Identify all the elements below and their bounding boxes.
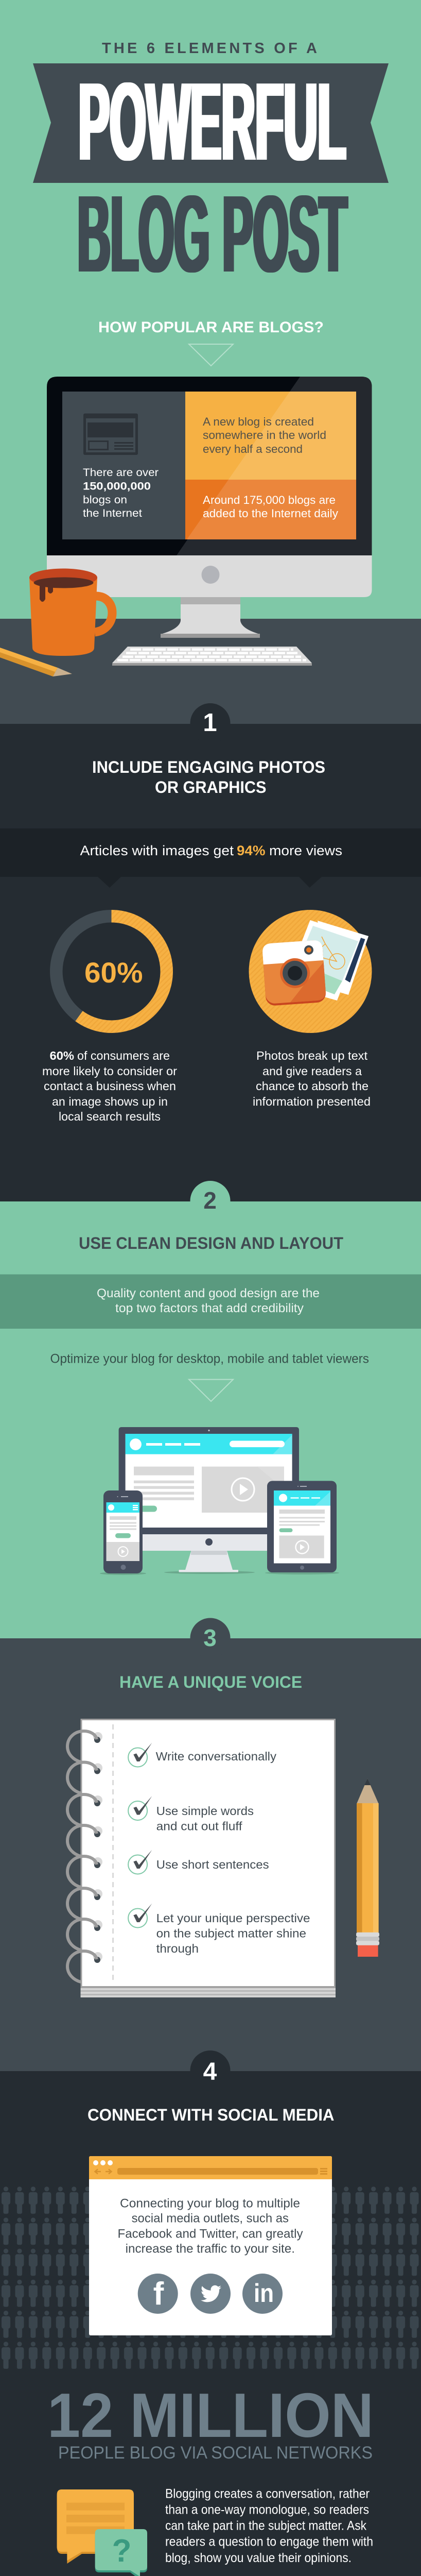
check icon 3: [128, 1850, 152, 1874]
band: articles with images stat: 94%: [237, 843, 266, 858]
section 1 heading: [92, 758, 325, 796]
section 2 heading: USE CLEAN DESIGN AND LAYOUT: [79, 1234, 343, 1252]
stat text: 175,000 blogs daily: Around 175,000 blogs are: [203, 494, 336, 506]
check icon 2: [128, 1796, 152, 1820]
text: blogging creates a conversation: [165, 2486, 373, 2565]
stat text: 150,000,000 blogs: blogs on: [83, 494, 127, 506]
text: 60 percent of consumers: more likely to consider or: [42, 1064, 177, 1078]
monitor chin: [47, 555, 372, 597]
checklist item 3: Use short sentences: [156, 1858, 269, 1871]
browser text: increase the traffic to your site.: [126, 2242, 295, 2256]
stat: 12 million: PEOPLE BLOG VIA SOCIAL NETWORKS: [58, 2443, 373, 2463]
text: 60 percent of consumers: [42, 1049, 177, 1123]
illustration: spiral notebook: [67, 1720, 336, 1997]
stat text: 150,000,000 blogs: the Internet: [83, 507, 142, 519]
band: quality content: Quality content and good design are the: [97, 1286, 320, 1300]
section 2 number badge: [190, 1181, 231, 1221]
text: blogging creates a conversation: can take part in the subject matter. Ask: [165, 2519, 366, 2533]
background: section 1: [0, 724, 421, 1201]
stat: 12 million: 12 MILLION: [47, 2380, 374, 2450]
panel: browser window: [89, 2156, 332, 2335]
checklist item 4: on the subject matter shine: [156, 1927, 306, 1940]
section 1 heading: INCLUDE ENGAGING PHOTOS: [92, 758, 325, 776]
browser toolbar: [89, 2156, 332, 2179]
browser text: [117, 2197, 303, 2256]
section 3 number badge: 3: [203, 1624, 217, 1651]
screen panel: top right stat: [185, 392, 356, 480]
illustration: responsive devices: [100, 1427, 339, 1575]
icon: facebook: f: [153, 2276, 164, 2312]
donut value arc: [79, 916, 167, 1027]
section 4 heading: CONNECT WITH SOCIAL MEDIA: [87, 2106, 335, 2124]
band: quality content: top two factors that add credibility: [115, 1301, 304, 1315]
device shadows: [100, 1571, 339, 1575]
device: tablet: [267, 1481, 337, 1572]
checklist item 4: [156, 1911, 310, 1955]
title banner ribbon: [33, 63, 389, 183]
icon: linkedin: [242, 2274, 283, 2314]
back photo: [318, 921, 369, 995]
notebook page edges: [80, 1987, 336, 1997]
stat text: 175,000 blogs daily: [203, 494, 338, 520]
illustration: keyboard: [112, 647, 312, 666]
background: header green: [0, 0, 421, 619]
checklist item 4: Let your unique perspective: [156, 1911, 310, 1925]
icon: facebook: [138, 2274, 178, 2314]
donut label: 60%: [84, 956, 143, 989]
section 4 number badge: [190, 2050, 231, 2091]
monitor stand: [161, 597, 260, 638]
background: desk: [0, 619, 421, 724]
text: photos break up text: chance to absorb the: [256, 1079, 369, 1093]
icon: linkedin: in: [254, 2279, 274, 2308]
front photo with bicycle: [285, 920, 361, 1001]
icon: twitter: [190, 2274, 231, 2314]
illustration: coffee mug: [29, 569, 112, 656]
background: section 3: [0, 1638, 421, 2071]
section 1 heading: OR GRAPHICS: [155, 778, 267, 796]
stat text: 150,000,000 blogs: 150,000,000: [83, 480, 151, 493]
icon: camera and photos: [249, 910, 372, 1033]
pattern: crowd of people: [0, 2187, 421, 2369]
checklist item 1: Write conversationally: [156, 1750, 277, 1763]
text: blogging creates a conversation: blog, show you value their opinions.: [165, 2551, 352, 2565]
text: 60 percent of consumers: an image shows up in: [52, 1095, 168, 1108]
checklist item 2: and cut out fluff: [156, 1820, 242, 1833]
arrow: triangle down: [189, 1380, 233, 1401]
text: photos break up text: [253, 1049, 371, 1108]
screen panel: bottom right stat: [185, 480, 356, 539]
green question bubble: ?: [112, 2533, 131, 2569]
text: photos break up text: Photos break up text: [256, 1049, 368, 1062]
band: quality content: [0, 1275, 421, 1329]
camera: [262, 940, 326, 1006]
browser text: Facebook and Twitter, can greatly: [117, 2227, 303, 2241]
text: photos break up text: and give readers a: [262, 1064, 362, 1078]
stat text: new blog every half second: every half a second: [203, 443, 303, 455]
checklist item 2: Use simple words: [156, 1804, 254, 1818]
notebook page: [81, 1720, 335, 1987]
icon: conversation bubbles: [57, 2489, 147, 2576]
band: articles with images stat: [0, 828, 421, 888]
check icon 1: [128, 1743, 152, 1767]
text: 60 percent of consumers: 60%: [49, 1049, 74, 1062]
band: articles with images stat: more views: [269, 843, 342, 858]
orange bubble: [57, 2489, 134, 2564]
section 1 number badge: 1: [203, 709, 217, 737]
checklist item 4: through: [156, 1942, 199, 1955]
browser page: [89, 2156, 332, 2335]
icon: browser window: [83, 413, 138, 455]
device: phone: [103, 1490, 143, 1573]
section 1 number badge: [190, 703, 231, 743]
browser text: social media outlets, such as: [132, 2212, 289, 2226]
monitor bezel: [47, 377, 372, 555]
text: optimize your blog: Optimize your blog for desktop, mobile and tablet viewers: [50, 1352, 369, 1366]
text: blogging creates a conversation: than a one-way monologue, so readers: [165, 2503, 369, 2517]
band: articles with images stat: Articles with images get: [80, 843, 234, 858]
section 3 number badge: [190, 1618, 231, 1658]
text: 60 percent of consumers: of consumers are: [77, 1049, 170, 1062]
stat text: new blog every half second: [203, 415, 326, 455]
green question bubble: [95, 2529, 147, 2576]
check icon 4: [128, 1904, 152, 1928]
illustration: desktop monitor with stats: [47, 377, 372, 638]
stat text: 150,000,000 blogs: [83, 467, 159, 519]
icon backdrop circle: [249, 910, 372, 1033]
background: section 2: [0, 1201, 421, 1638]
section 4 number badge: 4: [203, 2058, 217, 2086]
text: blogging creates a conversation: readers a question to engage them with: [165, 2535, 373, 2549]
monitor logo dot: [202, 566, 219, 584]
section 2 number badge: 2: [203, 1187, 217, 1214]
text: 60 percent of consumers: local search results: [59, 1110, 161, 1123]
arrow: triangle down: [189, 344, 233, 366]
stat text: 175,000 blogs daily: added to the Internet daily: [203, 507, 338, 520]
device: desktop: [119, 1427, 299, 1572]
bezel glare: [177, 377, 372, 555]
chart: 60 percent donut: [56, 916, 167, 1027]
stat text: new blog every half second: A new blog is created: [203, 415, 314, 428]
illustration: pencil on desk: [0, 648, 72, 676]
section 3 heading: HAVE A UNIQUE VOICE: [119, 1673, 302, 1691]
text: blogging creates a conversation: Blogging creates a conversation, rather: [165, 2486, 370, 2501]
screen glare: [187, 392, 356, 539]
notebook spiral rings: [67, 1731, 102, 1982]
stat text: 150,000,000 blogs: There are over: [83, 467, 159, 479]
illustration: upright pencil: [356, 1778, 379, 1957]
text: photos break up text: information presented: [253, 1095, 371, 1108]
title: [33, 40, 389, 295]
browser text: Connecting your blog to multiple: [120, 2197, 300, 2211]
heading: how popular are blogs: HOW POPULAR ARE BLOGS?: [98, 319, 324, 336]
checklist item 2: [156, 1804, 254, 1833]
text: 60 percent of consumers: contact a business when: [44, 1079, 176, 1093]
title kicker: THE 6 ELEMENTS OF A: [102, 40, 317, 57]
screen panel: left stat: [62, 392, 185, 539]
stat text: new blog every half second: somewhere in the world: [203, 429, 326, 442]
background: section 4: [0, 2071, 421, 2576]
